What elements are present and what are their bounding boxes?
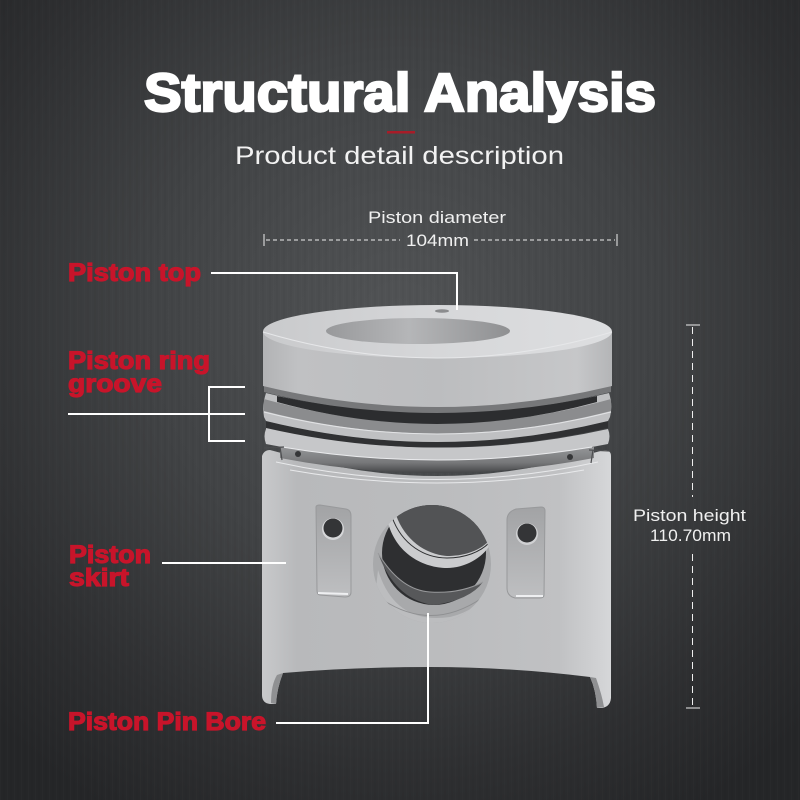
valve mark — [435, 309, 449, 313]
pin bore — [373, 505, 491, 618]
label: piston ring groove: groove — [68, 370, 162, 398]
label: piston ring groove — [68, 347, 210, 398]
left slot highlight — [318, 593, 348, 594]
groove three — [280, 447, 594, 473]
ring one land — [263, 393, 611, 442]
red accent divider — [387, 131, 415, 134]
left slot — [316, 505, 351, 597]
dimension: piston height: 110.70mm — [650, 526, 731, 545]
land three — [264, 427, 610, 460]
dimension: piston height — [633, 325, 746, 708]
land under crown — [264, 386, 611, 414]
groove two — [266, 421, 608, 448]
label: piston skirt — [69, 541, 151, 592]
piston illustration — [262, 305, 612, 708]
right slot — [507, 507, 545, 598]
top rim highlight — [263, 332, 612, 358]
crown top face — [263, 305, 612, 358]
label: piston skirt: Piston — [69, 541, 151, 569]
foot facets — [271, 673, 604, 708]
land three highlight — [282, 447, 592, 460]
dimension: piston height: Piston height — [633, 506, 746, 525]
groove one — [277, 396, 597, 424]
top recess — [326, 318, 510, 344]
dimension: piston diameter — [264, 208, 617, 250]
dimension: piston diameter: 104mm — [406, 231, 469, 250]
ring one highlight — [264, 412, 611, 434]
skirt upper rim highlights — [276, 462, 598, 483]
ring one metallic band — [264, 399, 611, 434]
dimension: piston diameter: Piston diameter — [368, 208, 506, 227]
label: piston skirt: skirt — [69, 564, 130, 592]
subtitle: Product detail description — [235, 142, 564, 170]
right slot hole — [516, 523, 538, 545]
label: piston top: Piston top — [68, 259, 201, 287]
piston skirt body — [262, 450, 611, 708]
label: piston ring groove: Piston ring — [68, 347, 210, 375]
label: piston pin bore: Piston Pin Bore — [68, 708, 266, 736]
callout lines — [68, 273, 457, 723]
ring notches — [264, 447, 610, 463]
right slot highlight — [516, 595, 543, 597]
title: Structural Analysis — [144, 63, 656, 123]
crown side — [263, 332, 612, 407]
oil holes — [295, 451, 573, 460]
left slot hole — [322, 518, 344, 540]
